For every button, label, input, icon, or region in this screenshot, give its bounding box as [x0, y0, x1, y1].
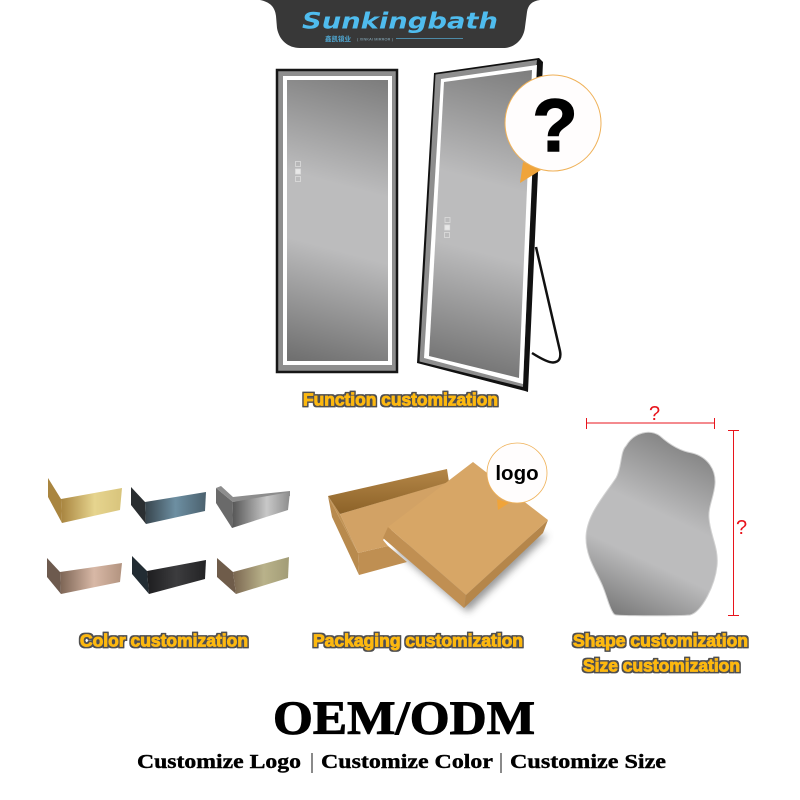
box base	[328, 469, 449, 575]
cardboard box	[328, 462, 548, 612]
box lid	[383, 462, 548, 608]
swatch: champagne	[217, 557, 289, 594]
brand name: Sunkingbath	[302, 10, 498, 34]
colour swatches	[47, 478, 290, 594]
header logo banner	[260, 0, 540, 48]
brand subtitle latin: ( XINKAI MIRROR )	[357, 38, 394, 42]
label: function customization: Function customization	[303, 390, 498, 410]
title: OEM/ODM	[273, 692, 535, 745]
touch controls	[444, 218, 450, 238]
swatch: silver	[216, 486, 290, 528]
swatch: rose	[47, 558, 122, 594]
touch controls	[296, 162, 300, 182]
subtitle	[137, 751, 666, 773]
swatch: black	[132, 556, 206, 594]
shaped mirror	[586, 432, 717, 616]
swatch: blue	[131, 487, 206, 524]
height dimension	[728, 430, 747, 616]
width dimension	[586, 403, 714, 429]
brand subtitle: 鑫凯镜业	[325, 34, 352, 43]
question mark bubble	[505, 75, 601, 183]
height dimension: ?	[736, 517, 747, 539]
stand	[532, 247, 560, 362]
subtitle: Customize Logo	[137, 751, 301, 773]
subtitle: Customize Size	[510, 751, 666, 773]
width dimension: ?	[649, 403, 660, 425]
front mirror	[277, 70, 397, 372]
label: packaging customization: Packaging customization	[313, 630, 523, 650]
logo bubble: logo	[495, 462, 539, 485]
label: shape customization: Shape customization	[573, 630, 748, 650]
label: color customization: Color customization	[80, 630, 248, 650]
swatch: gold	[48, 478, 122, 523]
leaning floor mirror	[417, 58, 560, 392]
subtitle: Customize Color	[321, 751, 493, 773]
question mark bubble: ?	[532, 84, 578, 167]
label: size customization: Size customization	[583, 656, 740, 676]
logo bubble	[487, 443, 547, 510]
